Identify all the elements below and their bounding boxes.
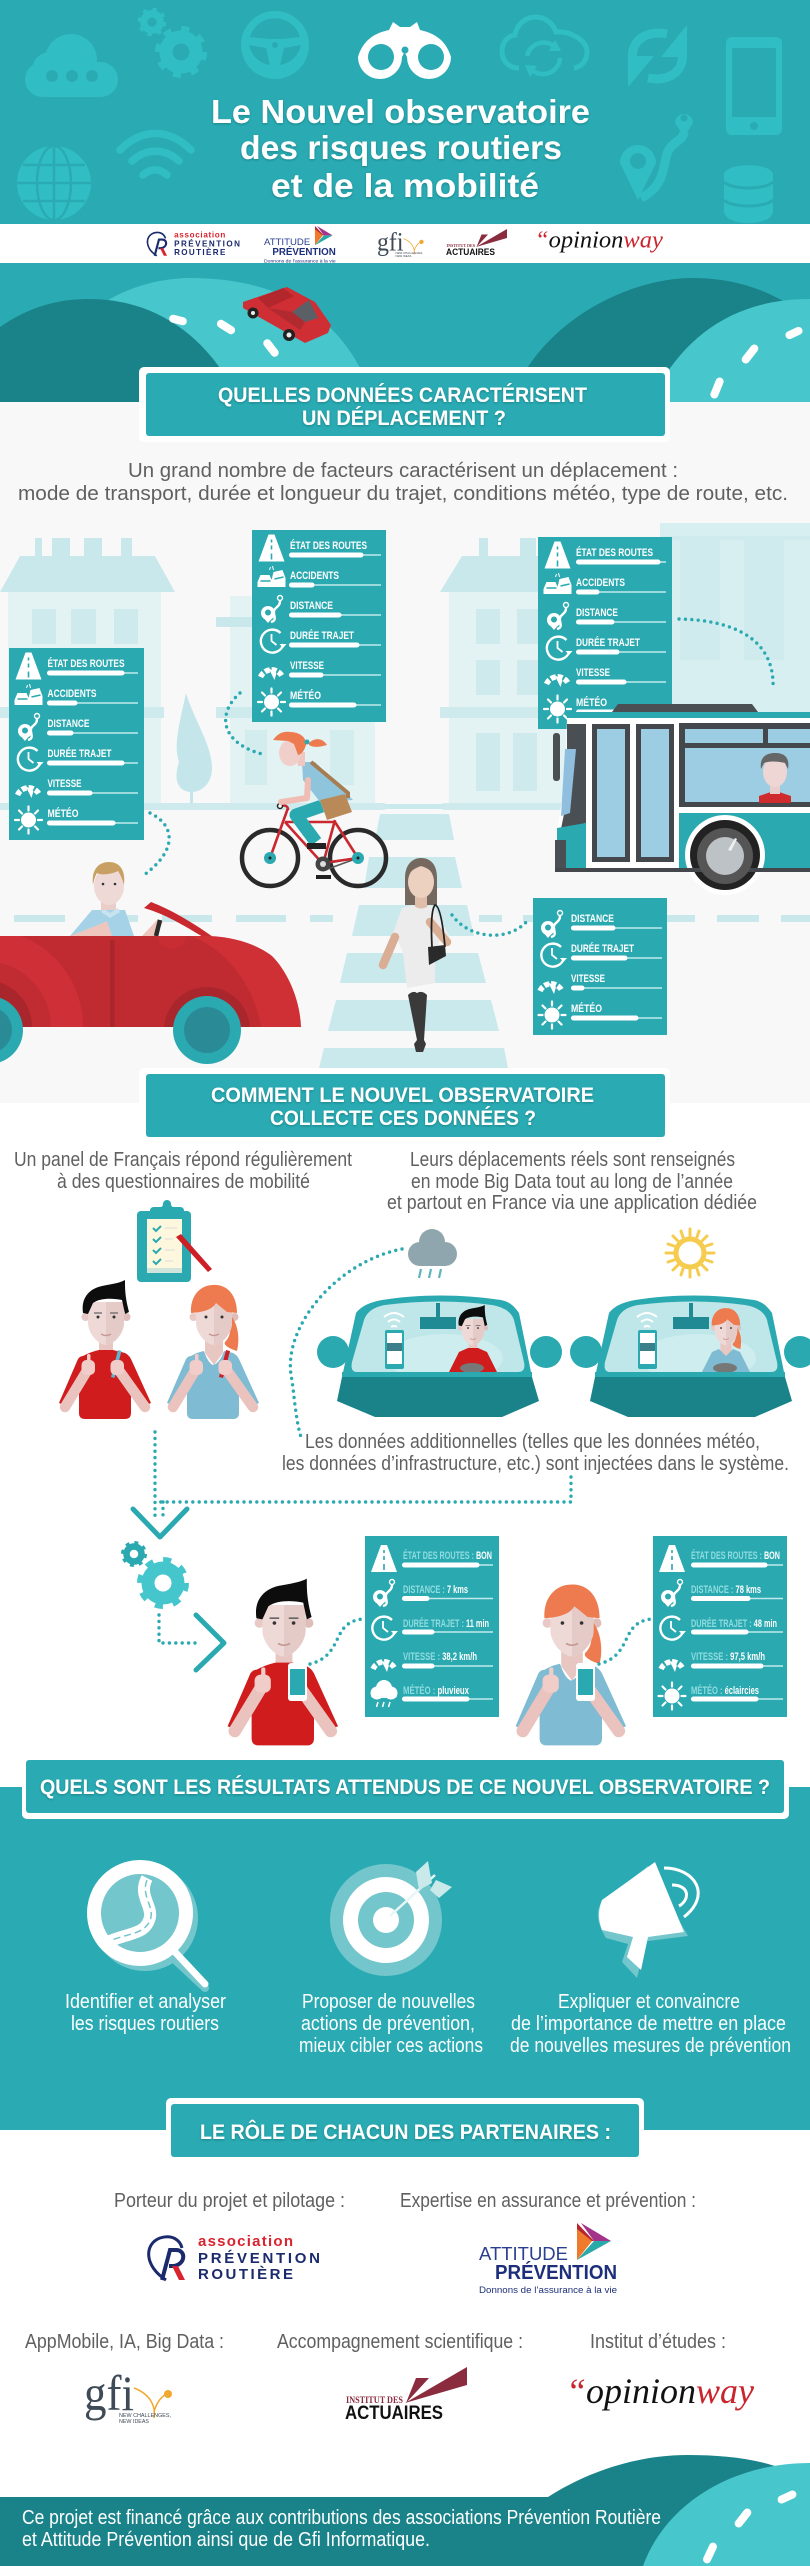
partner logos strip (0, 224, 810, 263)
title: et de la mobilité (271, 167, 539, 204)
panel: cyclist data panel: DURÉE TRAJET (290, 629, 354, 642)
heading: quelles données: UN DÉPLACEMENT ? (302, 407, 506, 430)
connector: cloud to text (290, 1249, 402, 1437)
icon: cloud with dots (25, 34, 118, 97)
icon: sun (666, 1229, 714, 1277)
heading: comment: COMMENT LE NOUVEL OBSERVATOIRE (211, 1084, 594, 1107)
logo: prévention routière: association (174, 230, 225, 239)
bus driver (759, 753, 791, 803)
partner: opinionway (566, 2331, 754, 2411)
logo: institut des actuaires: ACTUAIRES (345, 2403, 443, 2424)
arrow: chevron right (196, 1615, 224, 1670)
panel: pedestrian data panel (533, 898, 667, 1035)
heading: quelles données (139, 367, 670, 442)
panel: woman trip data: ÉTAT DES ROUTES : BON (691, 1549, 780, 1562)
connector: panel to bus (679, 619, 773, 688)
title: des risques routiers (240, 129, 562, 166)
heading: quelles données: QUELLES DONNÉES CARACTÉRISENT (218, 384, 587, 407)
car body (0, 936, 301, 1027)
panel: left data panel: DURÉE TRAJET (48, 747, 112, 760)
panel: left data panel: DISTANCE (48, 718, 90, 730)
icon: clipboard (137, 1200, 212, 1282)
pavement line (0, 803, 810, 810)
panel: left data panel: ÉTAT DES ROUTES (48, 657, 124, 670)
logo: gfi: NEW CHALLENGES, (396, 251, 423, 255)
text: big data description (387, 1149, 757, 1214)
text: big data description: et partout en France via une application dédiée (387, 1192, 757, 1214)
partner: opinionway: Institut d’études : (590, 2331, 726, 2353)
panel: pedestrian data panel: VITESSE (571, 973, 605, 985)
cyclist (242, 732, 386, 886)
logo: association prévention routière: PRÉVENTION (198, 2250, 320, 2267)
panel: bus data panel: ÉTAT DES ROUTES (576, 546, 653, 559)
text: identify: les risques routiers (71, 2013, 219, 2035)
crosswalk (319, 804, 508, 1068)
icon: wifi (120, 134, 191, 175)
connector: woman to panel (599, 1619, 652, 1664)
text: big data description: en mode Big Data tout au long de l’année (411, 1171, 733, 1193)
road dashes (168, 314, 804, 400)
panel: cyclist data panel: ÉTAT DES ROUTES (290, 539, 367, 552)
panel: street scene (0, 523, 810, 1068)
logo: attitude prévention: ATTITUDE (479, 2244, 568, 2264)
icon: red car top view (243, 287, 331, 343)
panel: cyclist data panel: DISTANCE (290, 600, 333, 612)
panel: bus data panel: VITESSE (576, 667, 610, 679)
icon: sync arrows (628, 25, 687, 87)
text: propose: actions de prévention, (301, 2013, 475, 2035)
logo: prévention routière: ROUTIÈRE (174, 248, 226, 257)
text: panel description: à des questionnaires de mobilité (57, 1171, 310, 1193)
text: funding (22, 2507, 661, 2551)
title: Le Nouvel observatoire (211, 93, 590, 130)
connector: pedestrian to panel (452, 915, 528, 935)
panel: cyclist data panel: MÉTÉO (290, 689, 321, 702)
icon: smartphone (726, 37, 782, 135)
icon: cloud sync (502, 17, 587, 77)
logo: institut des actuaires (446, 229, 507, 258)
panel: man trip data (365, 1536, 499, 1717)
heading: résultats attendus (22, 1760, 789, 1819)
icon: wifi phone (384, 1313, 404, 1369)
panel: man trip data: MÉTÉO : pluvieux (403, 1684, 470, 1697)
icon: binoculars (358, 22, 451, 79)
logo: gfi: NEW IDEAS (119, 2419, 150, 2425)
panel: pedestrian data panel: DURÉE TRAJET (571, 942, 634, 955)
text: identify (65, 1991, 226, 2035)
hill: left dark (0, 299, 240, 402)
logo: association prévention routière: association (198, 2233, 293, 2250)
icon: target (330, 1861, 452, 1976)
logo: institut des actuaires (345, 2367, 467, 2424)
hill: left light road (100, 278, 375, 402)
panel: bus data panel (538, 537, 672, 729)
panel: left data panel (9, 648, 144, 840)
panel: woman trip data: VITESSE : 97,5 km/h (691, 1651, 765, 1663)
windshield (144, 902, 213, 937)
wheels (242, 830, 386, 886)
panel: cyclist data panel (252, 530, 386, 722)
logo: gfi (84, 2365, 172, 2425)
logo: association prévention routière: ROUTIÈRE (198, 2266, 293, 2283)
building left (0, 538, 175, 803)
text: intro paragraph (18, 460, 788, 505)
icon: database (724, 165, 773, 223)
logo: institut des actuaires: INSTITUT DES (446, 243, 475, 248)
partner: institut des actuaires (277, 2331, 523, 2424)
connector: man to panel (310, 1619, 363, 1664)
cyclist body (296, 806, 322, 842)
heading: comment (139, 1068, 670, 1143)
logo: opinionway: “opinionway (566, 2371, 754, 2411)
bus windows (679, 723, 810, 807)
panel: woman trip data: DISTANCE : 78 kms (691, 1584, 761, 1596)
text: explain (510, 1991, 791, 2057)
connector: data to processing (155, 1432, 571, 1517)
text: panel description (14, 1149, 352, 1193)
panel: woman trip data: DURÉE TRAJET : 48 min (691, 1617, 777, 1630)
panel: man trip data: DISTANCE : 7 kms (403, 1584, 468, 1596)
hill: right dark (510, 278, 785, 402)
top banner (0, 0, 810, 224)
logo: gfi: NEW CHALLENGES, (119, 2413, 171, 2419)
building centre (216, 596, 375, 803)
text: panel description: Un panel de Français répond régulièrement (14, 1149, 352, 1171)
logo: attitude prévention: Donnons de l’assurance à la vie (479, 2285, 617, 2295)
text: explain: de l’importance de mettre en place (511, 2013, 786, 2035)
logo: institut des actuaires: ACTUAIRES (446, 247, 495, 258)
partner: prévention routière (114, 2190, 345, 2283)
panel: pedestrian data panel: DISTANCE (571, 913, 614, 925)
text: additional data (282, 1431, 789, 1475)
building far right (660, 523, 810, 803)
partner: institut des actuaires: Accompagnement scientifique : (277, 2331, 523, 2353)
text: big data description: Leurs déplacements réels sont renseignés (410, 1149, 735, 1171)
partner: gfi: AppMobile, IA, Big Data : (25, 2331, 224, 2353)
text: intro paragraph: mode de transport, durée et longueur du trajet, conditions météo, type de route, etc. (18, 483, 788, 505)
logo: prévention routière: PRÉVENTION (174, 240, 240, 249)
logo: attitude prévention: Donnons de l’assurance à la vie (264, 258, 336, 263)
panel: bus data panel: DISTANCE (576, 607, 618, 619)
connector: panel to cyclist (226, 693, 266, 755)
panel: bus data panel: DURÉE TRAJET (576, 636, 640, 649)
logo: gfi: gfi (377, 226, 403, 256)
text: propose: Proposer de nouvelles (302, 1991, 475, 2013)
heading: rôle des partenaires: LE RÔLE DE CHACUN DES PARTENAIRES : (200, 2120, 611, 2144)
hill: footer road (643, 2463, 810, 2566)
logo: opinionway: “opinionway (535, 227, 663, 254)
icon: globe (17, 146, 91, 220)
logo: attitude prévention: PRÉVENTION (495, 2261, 617, 2284)
logo: association prévention routière (149, 2233, 320, 2283)
logo: gfi: gfi (84, 2365, 134, 2421)
bus (553, 704, 810, 895)
text: propose (299, 1991, 483, 2057)
arrow: chevron down (133, 1509, 187, 1537)
logo: institut des actuaires: INSTITUT DES (346, 2395, 403, 2405)
panel: left data panel: VITESSE (48, 778, 82, 790)
building right (440, 538, 620, 803)
panel: expected results (0, 1760, 810, 2130)
title (211, 93, 590, 204)
road dashes (14, 915, 810, 922)
panel: man trip data: DURÉE TRAJET : 11 min (403, 1617, 489, 1630)
panel: left data panel: MÉTÉO (48, 807, 79, 820)
icon: gears (139, 9, 204, 75)
text: funding: Ce projet est financé grâce aux contributions des associations Prévention Routière (22, 2507, 661, 2529)
panel: woman trip data (653, 1536, 787, 1717)
road band with hills (0, 263, 810, 402)
icon: route pin (620, 114, 693, 200)
text: additional data: Les données additionnelles (telles que les données météo, (305, 1431, 760, 1453)
logo: prévention routière (147, 230, 240, 257)
connector: panel to driver (144, 813, 169, 875)
car with male driver (317, 1296, 562, 1417)
hill: right light road (650, 299, 810, 402)
logo: attitude prévention (264, 226, 336, 263)
partner: attitude prévention: Expertise en assurance et prévention : (400, 2190, 696, 2212)
woman with questionnaire (167, 1285, 259, 1419)
panel: man trip data: VITESSE : 38,2 km/h (403, 1651, 477, 1663)
panel: woman trip data: MÉTÉO : éclaircies (691, 1684, 759, 1697)
panel: cyclist data panel: VITESSE (290, 660, 324, 672)
icon: processing gears (122, 1542, 186, 1606)
pedestrian (383, 858, 450, 1052)
car with female driver (570, 1296, 810, 1417)
panel: bus data panel: MÉTÉO (576, 696, 607, 709)
bus doors (594, 726, 672, 860)
heading: comment: COLLECTE CES DONNÉES ? (270, 1107, 536, 1130)
logo: gfi (377, 226, 424, 258)
text: propose: mieux cibler ces actions (299, 2035, 483, 2057)
partner: gfi (25, 2331, 224, 2425)
heading: rôle des partenaires (166, 2098, 644, 2158)
woman with smartphone (516, 1585, 626, 1745)
footer (0, 2455, 810, 2566)
convertible car with driver (0, 862, 301, 1064)
tree (177, 693, 212, 805)
text: identify: Identifier et analyser (65, 1991, 226, 2013)
panel: man trip data: ÉTAT DES ROUTES : BON (403, 1549, 492, 1562)
connector: processing to people (159, 1615, 199, 1643)
partner: prévention routière: Porteur du projet et pilotage : (114, 2190, 345, 2212)
road dashes (702, 2489, 798, 2565)
text: explain: Expliquer et convaincre (558, 1991, 740, 2013)
icon: rain cloud (408, 1229, 457, 1278)
driver (70, 862, 163, 936)
partner: attitude prévention (400, 2190, 696, 2295)
panel: left data panel: ACCIDENTS (48, 688, 96, 700)
man with smartphone (228, 1579, 338, 1745)
icon: steering wheel (241, 11, 309, 79)
panel: pedestrian data panel: MÉTÉO (571, 1002, 602, 1015)
logo: attitude prévention: PRÉVENTION (272, 245, 336, 258)
text: funding: et Attitude Prévention ainsi que de Gfi Informatique. (22, 2529, 430, 2551)
panel: cyclist data panel: ACCIDENTS (290, 570, 339, 582)
heading: résultats attendus: QUELS SONT LES RÉSULTATS ATTENDUS DE CE NOUVEL OBSERVATOIRE ? (40, 1776, 770, 1799)
man with questionnaire (59, 1280, 151, 1419)
logo: gfi: NEW IDEAS (396, 254, 412, 258)
text: intro paragraph: Un grand nombre de facteurs caractérisent un déplacement : (128, 460, 678, 482)
icon: wifi phone (637, 1313, 657, 1369)
logo: attitude prévention: ATTITUDE (264, 237, 310, 247)
panel: bus data panel: ACCIDENTS (576, 577, 625, 589)
icon: magnifier (92, 1865, 205, 1988)
logo: attitude prévention (479, 2223, 617, 2295)
icon: megaphone (598, 1862, 698, 1978)
